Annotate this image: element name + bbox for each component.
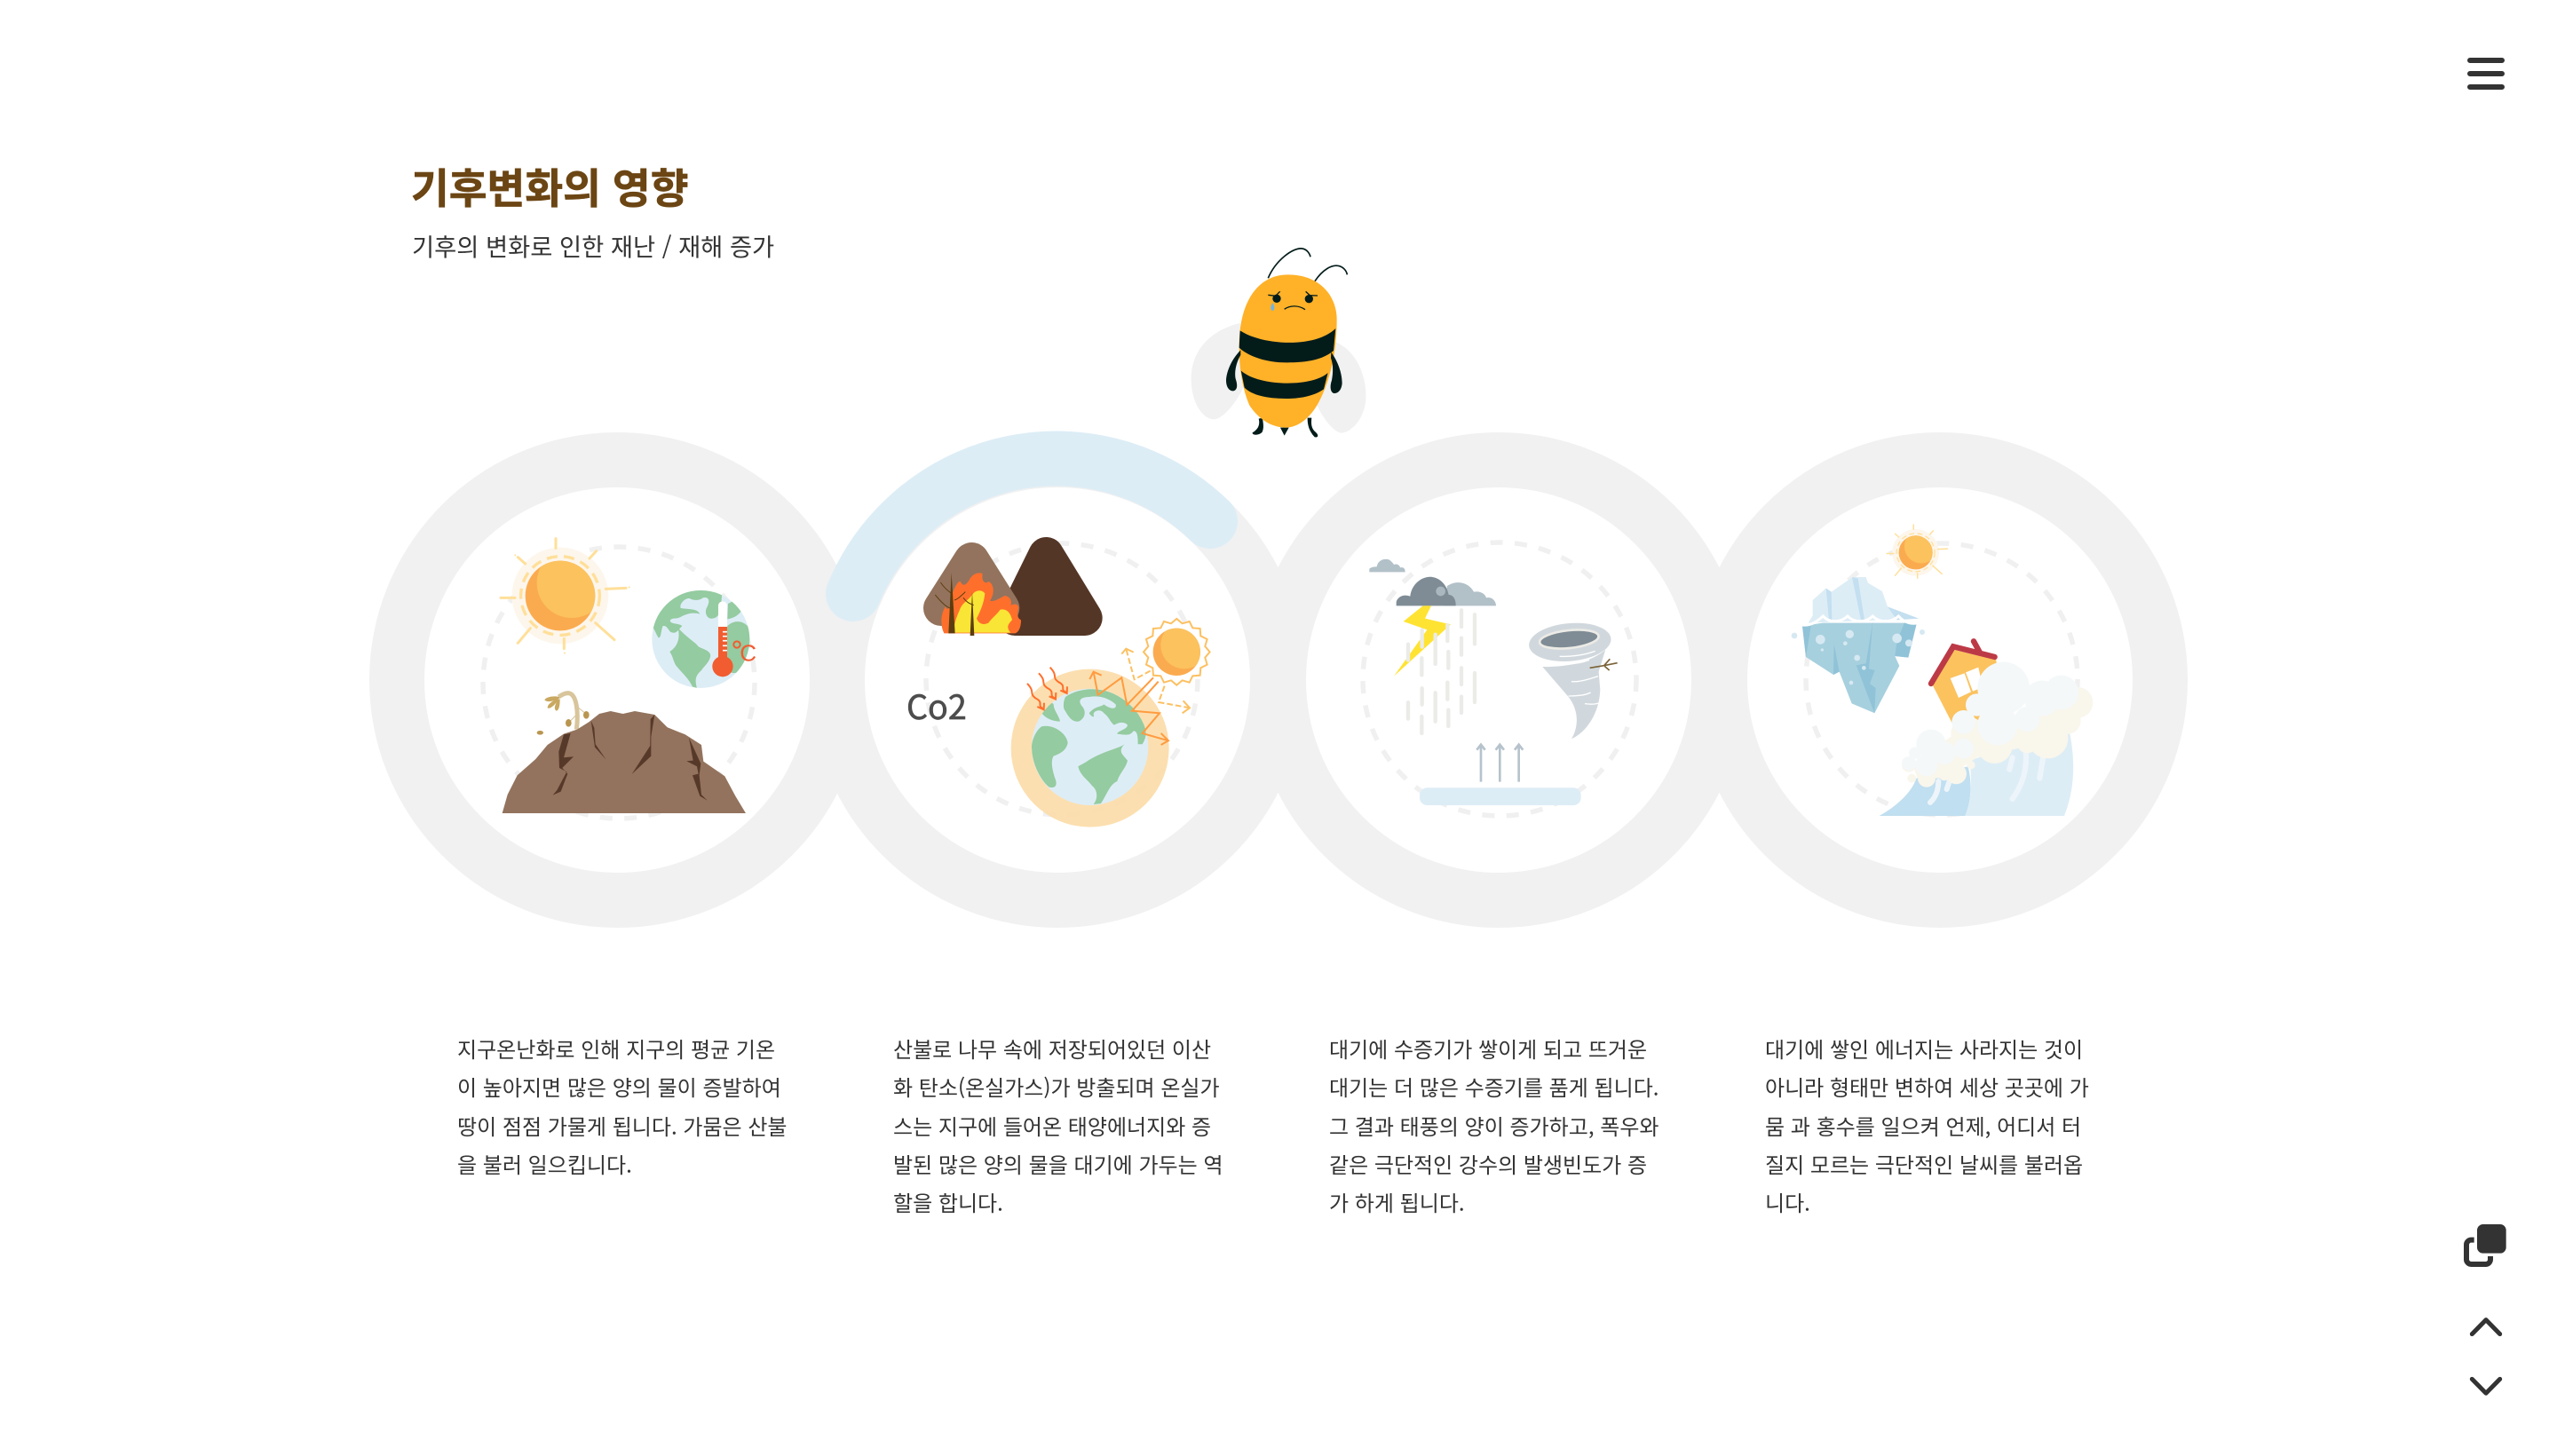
icon: wilted plant [537,693,590,735]
icon: earth with thermometer [651,590,756,688]
text block: wildfire and greenhouse gas: 화 탄소(온실가스)가 방출되며 온실가 [893,1071,1220,1102]
dashed inner circles [483,542,2078,819]
icon: earth with thermometer: C [740,640,756,667]
icon: small sun [1887,525,1948,578]
label: Co2: Co2 [906,680,967,729]
text block: wildfire and greenhouse gas [893,1033,1223,1217]
text block: extreme weather: 뭄 과 홍수를 일으켜 언제, 어디서 터 [1765,1110,2081,1141]
text block: wildfire and greenhouse gas: 할을 합니다. [893,1186,1003,1217]
subtitle: 기후의 변화로 인한 재난 / 재해 증가 [412,227,774,263]
text block: water vapor and rainfall: 대기는 더 많은 수증기를 품게 됩니다. [1329,1071,1658,1102]
icon: chevron up [2472,1320,2500,1334]
text block: wildfire and greenhouse gas: 스는 지구에 들어온 태양에너지와 증 [893,1110,1211,1141]
text block: water vapor and rainfall: 그 결과 태풍의 양이 증가하고, 폭우와 [1329,1110,1658,1141]
panel: iceberg and flood illustration [1792,525,2093,816]
icon: burning mountains [935,555,1085,636]
icon: iceberg [1792,577,1925,713]
progress arc: blue [853,459,1210,594]
icon: chevron down [2472,1379,2500,1393]
text block: water vapor and rainfall: 같은 극단적인 강수의 발생빈도가 증 [1329,1148,1647,1179]
text block: water vapor and rainfall: 가 하게 됩니다. [1329,1186,1465,1217]
icon: tilted house [1931,641,2000,737]
icon: greenhouse earth [1011,669,1169,827]
text block: wildfire and greenhouse gas: 발된 많은 양의 물을 대기에 가두는 역 [893,1148,1223,1179]
title: 기후변화의 영향 [411,156,688,216]
text block: water vapor and rainfall: 대기에 수증기가 쌓이게 되고 뜨거운 [1329,1033,1647,1064]
icon: sun [501,539,630,654]
icon: sea foam [1902,662,2093,787]
text block: extreme weather: 질지 모르는 극단적인 날씨를 불러옵 [1765,1148,2083,1179]
text block: wildfire and greenhouse gas: 산불로 나무 속에 저장되어있던 이산 [893,1033,1211,1064]
icon: cracked mountain [503,711,746,813]
panel: storm illustration [1369,559,1618,805]
icon: lightning [1394,605,1451,677]
icon: sun with heat arrows [1027,619,1210,745]
rings background [397,460,2160,900]
icon: water surface [1420,787,1581,805]
text block: extreme weather: 아니라 형태만 변하여 세상 곳곳에 가 [1765,1071,2089,1102]
icon: bee mascot [1191,249,1366,437]
icon: clouds [1369,559,1496,605]
text block: extreme weather [1765,1033,2089,1217]
icon: rain [1408,610,1475,733]
panel: wildfire and CO2 illustration [906,555,1210,827]
text block: global warming and drought: 이 높아지면 많은 양의 물이 증발하여 [457,1071,781,1102]
text block: global warming and drought: 땅이 점점 가물게 됩니다. 가뭄은 산불 [457,1110,787,1141]
text block: global warming and drought [457,1033,787,1179]
icon: hamburger menu [2470,60,2502,87]
icon: evaporation arrows [1476,745,1523,782]
text block: extreme weather: 대기에 쌓인 에너지는 사라지는 것이 [1765,1033,2083,1064]
panel: drought illustration [501,539,756,813]
text block: water vapor and rainfall [1329,1033,1658,1217]
icon: copy [2466,1224,2506,1264]
icon: wave [1880,728,2073,816]
text block: extreme weather: 니다. [1765,1186,1810,1217]
icon: tornado [1527,620,1618,739]
illustration layer [369,58,2506,1396]
text block: global warming and drought: 지구온난화로 인해 지구의 평균 기온 [457,1033,775,1064]
text block: global warming and drought: 을 불러 일으킵니다. [457,1148,632,1179]
